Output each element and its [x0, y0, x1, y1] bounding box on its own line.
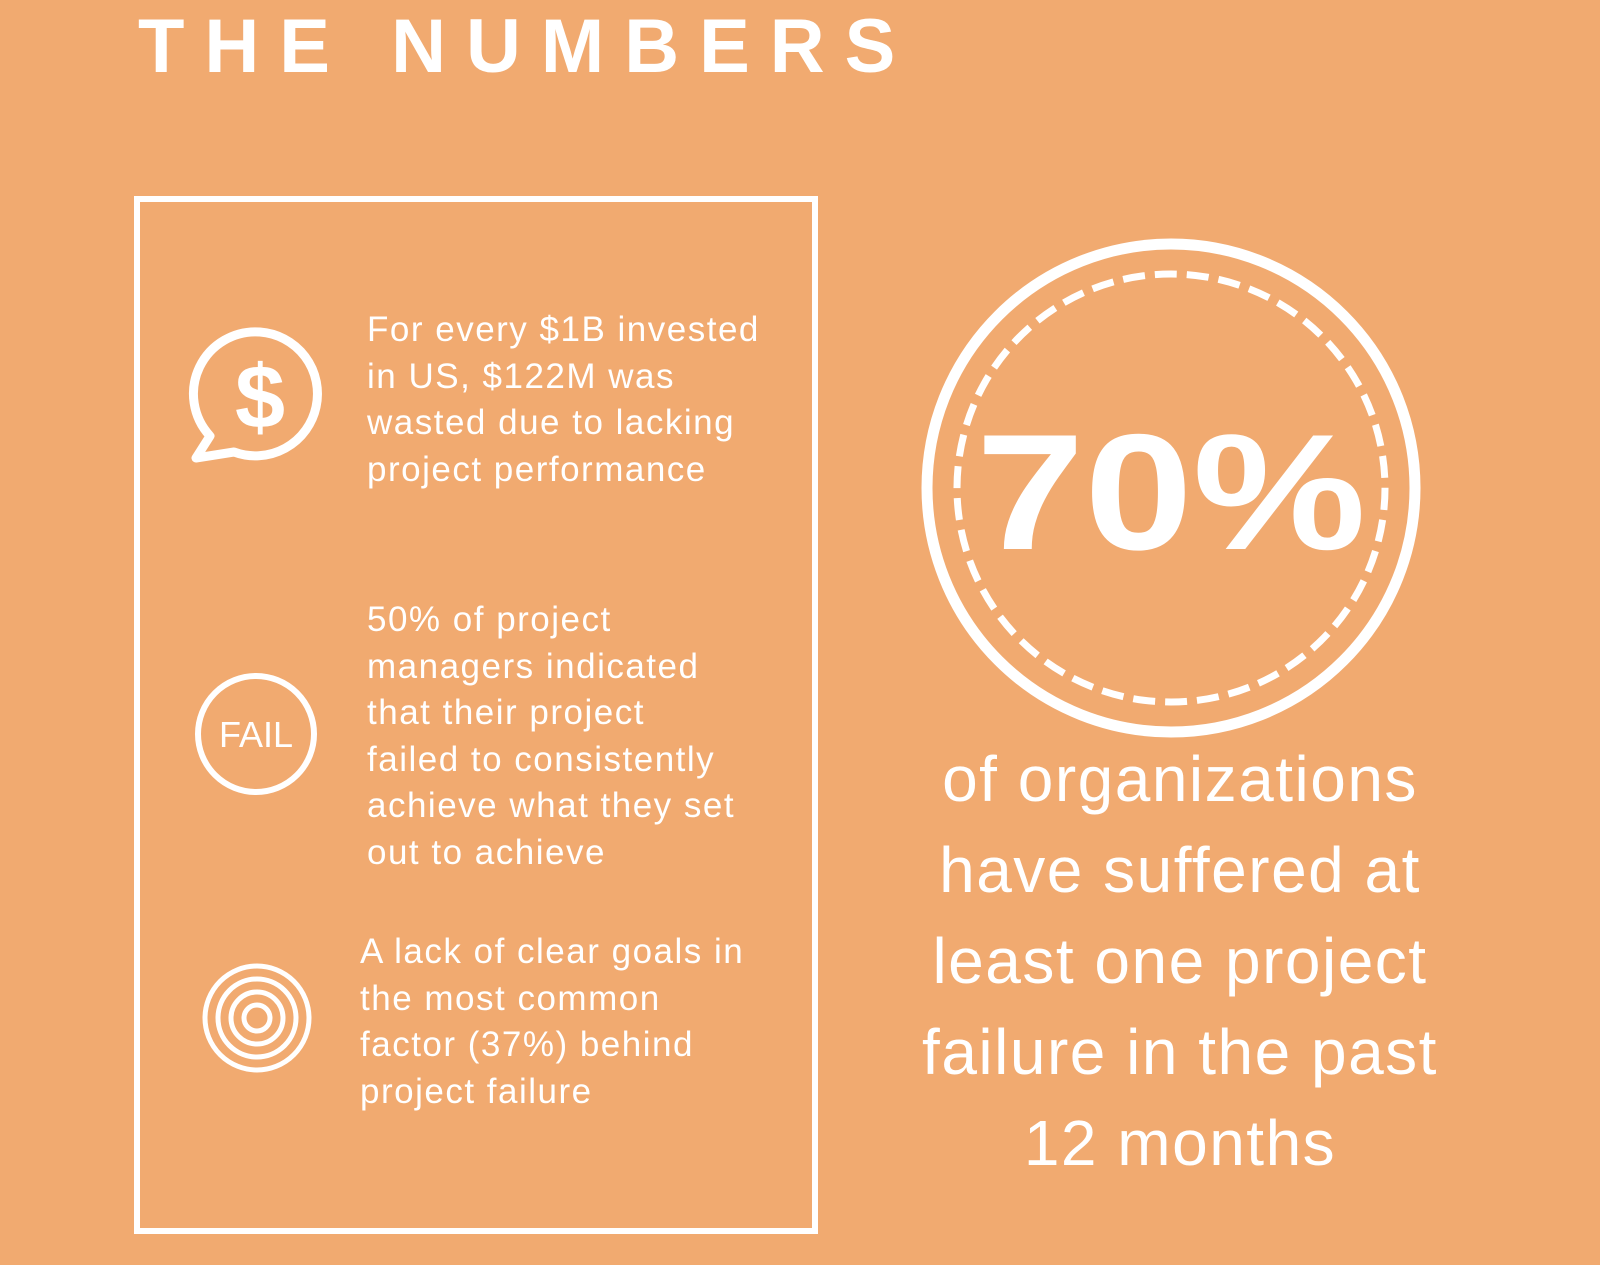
text: 70% caption: 12 months	[1024, 1107, 1336, 1179]
icon: dollar speech bubble	[188, 327, 322, 462]
text: stat 3: the most common	[360, 978, 661, 1018]
icon: FAIL circle	[195, 673, 317, 795]
text: 70% caption: of organizations	[942, 743, 1418, 815]
text: 70% caption: failure in the past	[922, 1016, 1438, 1088]
text: 70% caption: least one project	[932, 925, 1428, 997]
icon: FAIL circle: FAIL	[219, 714, 293, 755]
text: stat 2: achieve what they set	[367, 786, 735, 825]
big circle with 70%: 70%	[976, 400, 1366, 584]
text: stat 1: in US, $122M was	[367, 356, 675, 396]
text: stat 3: factor (37%) behind	[360, 1025, 694, 1064]
text: stat 2	[367, 600, 735, 872]
text: stat 1: For every $1B invested	[367, 310, 760, 349]
big circle with 70%	[922, 238, 1420, 738]
icon: dollar speech bubble: $	[235, 348, 285, 448]
icon: target	[202, 964, 312, 1072]
text: stat 1: wasted due to lacking	[367, 403, 735, 442]
text: stat 1: project performance	[367, 450, 707, 488]
text: stat 2: that their project	[367, 693, 645, 732]
text: stat 2: failed to consistently	[367, 740, 715, 778]
text: 70% caption: have suffered at	[939, 834, 1421, 906]
text: stat 3: A lack of clear goals in	[360, 932, 744, 971]
text: 70% caption	[922, 743, 1438, 1179]
panel: stats box	[134, 196, 818, 1234]
text: stat 2: out to achieve	[367, 832, 606, 872]
text: stat 3: project failure	[360, 1072, 593, 1110]
text: stat 1	[367, 310, 760, 488]
title: THE NUMBERS	[138, 4, 915, 89]
text: stat 2: managers indicated	[367, 646, 699, 686]
text: stat 2: 50% of project	[367, 600, 612, 639]
text: stat 3	[360, 932, 744, 1110]
